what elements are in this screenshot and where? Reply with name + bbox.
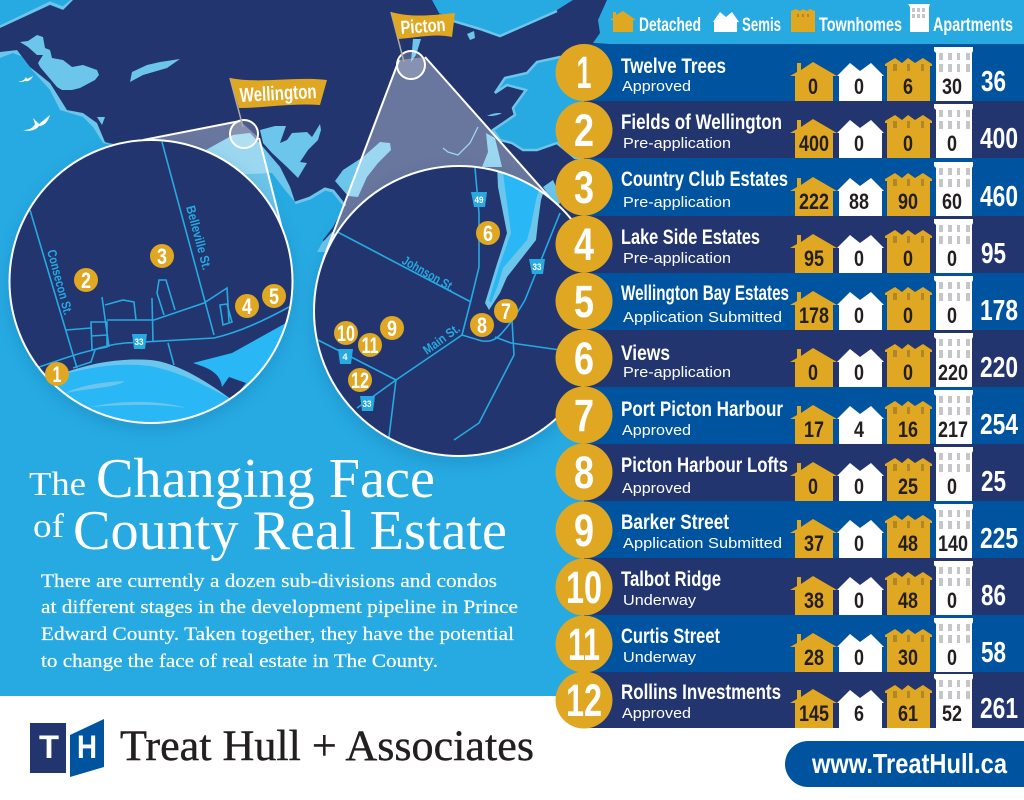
zoom cone outlines xyxy=(143,57,575,260)
legend: Townhomes xyxy=(791,9,902,36)
map markers 1 to 12: 12 xyxy=(351,368,369,393)
intro text: at different stages in the development pipeline in Prince xyxy=(41,598,518,618)
row 5: Wellington Bay Estates xyxy=(556,272,1024,330)
row 9 unit counts xyxy=(790,504,973,558)
row 4 unit counts: 95 xyxy=(804,246,824,271)
row 5 status: Application Submitted xyxy=(623,309,782,326)
road label: Consecon St.: Consecon St. xyxy=(44,248,76,316)
row 11: Curtis Street xyxy=(556,615,1024,672)
intro text: There are currently a dozen sub-divisions and condos xyxy=(41,572,497,592)
row 3 name: Country Club Estates xyxy=(621,168,788,191)
row 6 unit counts: 0 xyxy=(903,360,913,385)
row 6 name: Views xyxy=(621,342,670,365)
legend: Townhomes: Townhomes xyxy=(819,15,902,36)
row 4 unit counts xyxy=(790,219,973,273)
row 7 unit counts xyxy=(790,390,973,444)
row 10 unit counts: 38 xyxy=(804,588,824,613)
row 1: Twelve Trees xyxy=(556,44,1024,101)
map markers 1 to 12: 1 xyxy=(52,362,62,387)
row 2 badge: 2 xyxy=(574,105,594,156)
row 11 total: 58 xyxy=(981,637,1006,669)
row 4 unit counts: 0 xyxy=(947,246,957,271)
row 12 status: Approved xyxy=(622,705,691,722)
row 4 total: 95 xyxy=(981,238,1006,270)
row 3 unit counts: 222 xyxy=(799,189,829,214)
row 11 unit counts: 30 xyxy=(898,645,918,670)
row 5 badge xyxy=(556,272,612,330)
row 1 total: 36 xyxy=(981,66,1006,98)
row 9 unit counts: 37 xyxy=(804,531,824,556)
logo mark: H xyxy=(77,729,97,765)
row 5 unit counts: 178 xyxy=(799,303,829,328)
row 5 unit counts: 0 xyxy=(947,303,957,328)
row 9 badge: 9 xyxy=(574,505,594,556)
row 5 unit counts: 0 xyxy=(854,303,864,328)
map markers 1 to 12: 6 xyxy=(483,221,493,246)
row 6 unit counts: 0 xyxy=(808,360,818,385)
website pill xyxy=(785,741,1024,787)
row 2 badge xyxy=(556,102,612,158)
row 12 unit counts: 6 xyxy=(854,701,864,726)
row 7 unit counts: 17 xyxy=(804,417,824,442)
row 3 badge: 3 xyxy=(574,162,594,213)
flag: Wellington: Wellington xyxy=(239,81,317,107)
highway shield 33: 33 xyxy=(134,337,144,347)
flag: Wellington xyxy=(230,78,327,127)
row 2 unit counts: 0 xyxy=(903,131,913,156)
row 1 unit counts: 0 xyxy=(808,74,818,99)
legend: Detached xyxy=(610,11,701,36)
row 8 unit counts: 0 xyxy=(854,474,864,499)
row 6 status: Pre-application xyxy=(623,364,731,381)
row 5 name: Wellington Bay Estates xyxy=(621,282,789,305)
row 9 unit counts: 0 xyxy=(854,531,864,556)
row 5 unit counts: 0 xyxy=(903,303,913,328)
row 1 unit counts: 6 xyxy=(903,74,913,99)
row 8 badge xyxy=(556,444,612,500)
row 11 status: Underway xyxy=(623,649,697,666)
row 7 unit counts: 217 xyxy=(938,417,968,442)
row 4 unit counts: 0 xyxy=(854,246,864,271)
row 2 unit counts: 0 xyxy=(947,131,957,156)
inset map: Wellington xyxy=(10,140,295,440)
row 8 unit counts: 0 xyxy=(947,474,957,499)
row 2 status: Pre-application xyxy=(623,135,731,152)
logo mark xyxy=(30,719,104,777)
row 10 unit counts: 48 xyxy=(898,588,918,613)
row 8 status: Approved xyxy=(622,480,691,497)
row 7 name: Port Picton Harbour xyxy=(621,398,783,421)
flag: Picton xyxy=(391,12,455,62)
footer band xyxy=(0,696,1024,800)
map markers 1 to 12: 8 xyxy=(477,313,487,338)
row 9 name: Barker Street xyxy=(621,511,729,534)
title: County Real Estate xyxy=(73,500,507,562)
seagull small xyxy=(18,76,33,82)
row 4 unit counts: 0 xyxy=(903,246,913,271)
row 12: Rollins Investments xyxy=(556,672,1024,728)
intro text xyxy=(41,572,518,672)
map markers 1 to 12: 5 xyxy=(269,284,279,309)
row 3 unit counts: 88 xyxy=(849,189,869,214)
row 12 unit counts: 145 xyxy=(799,701,829,726)
row 8 name: Picton Harbour Lofts xyxy=(621,454,788,477)
row 8: Picton Harbour Lofts xyxy=(556,444,1024,501)
road label: Johnson St.: Johnson St. xyxy=(400,253,457,295)
row 4 badge: 4 xyxy=(574,219,594,270)
row 4 name: Lake Side Estates xyxy=(621,226,760,249)
row 12 unit counts xyxy=(790,674,973,728)
row 1 name: Twelve Trees xyxy=(621,55,726,78)
row 3 status: Pre-application xyxy=(623,194,731,211)
legend xyxy=(610,4,1013,36)
row 1 unit counts: 30 xyxy=(942,74,962,99)
row 10 name: Talbot Ridge xyxy=(621,568,721,591)
row 10 unit counts xyxy=(790,561,973,615)
row 9: Barker Street xyxy=(556,501,1024,558)
map markers 1 to 12 xyxy=(45,221,518,393)
road label: Belleville St.: Belleville St. xyxy=(183,204,215,272)
row 10 badge: 10 xyxy=(566,562,602,613)
legend: Semis xyxy=(713,12,781,36)
title: of xyxy=(33,508,65,545)
row 8 badge: 8 xyxy=(574,447,594,498)
locator circle: Picton xyxy=(397,51,425,79)
row 3 unit counts xyxy=(790,162,973,216)
row 6 unit counts: 0 xyxy=(854,360,864,385)
map markers 1 to 12: 2 xyxy=(81,268,91,293)
locator circle: Wellington xyxy=(230,120,258,148)
row 7 unit counts: 4 xyxy=(854,417,865,442)
Wellington inset roads xyxy=(30,142,289,368)
title: Changing Face xyxy=(96,448,435,510)
row 8 unit counts xyxy=(790,447,973,501)
intro text: to change the face of real estate in The County. xyxy=(41,652,438,672)
row 1 unit counts xyxy=(790,47,973,101)
row 11 unit counts: 28 xyxy=(804,645,824,670)
highway shield 49: 49 xyxy=(474,195,484,205)
Wellington inset water xyxy=(57,360,230,422)
row 2 unit counts: 400 xyxy=(799,131,829,156)
row 7 status: Approved xyxy=(622,422,691,439)
row 6 badge: 6 xyxy=(574,333,594,384)
row 12 unit counts: 52 xyxy=(942,701,962,726)
row 7 badge: 7 xyxy=(574,390,594,441)
row 11 name: Curtis Street xyxy=(621,625,720,648)
row 2 name: Fields of Wellington xyxy=(621,111,782,134)
row 1 badge: 1 xyxy=(576,47,592,98)
zoom cone: Picton xyxy=(323,57,575,260)
row 6 unit counts xyxy=(790,333,973,387)
highway shield 4 xyxy=(338,349,353,364)
row 10: Talbot Ridge xyxy=(556,558,1024,616)
map markers 1 to 12: 11 xyxy=(362,333,378,358)
row 10 total: 86 xyxy=(981,580,1006,612)
highway shield 33 east: 33 xyxy=(532,262,542,272)
row 11 badge: 11 xyxy=(568,619,600,670)
map markers 1 to 12: 3 xyxy=(157,244,167,269)
row 1 unit counts: 0 xyxy=(854,74,864,99)
row 2: Fields of Wellington xyxy=(556,101,1024,158)
highway shield 4: 4 xyxy=(342,352,348,362)
intro text: Edward County. Taken together, they have the potential xyxy=(41,625,514,645)
row 11 unit counts: 0 xyxy=(854,645,864,670)
row 9 unit counts: 140 xyxy=(938,531,968,556)
row 11 unit counts xyxy=(790,618,973,672)
row 12 badge: 12 xyxy=(566,675,602,726)
row 10 badge xyxy=(556,558,612,616)
Picton inset water xyxy=(485,172,543,310)
row 6 badge xyxy=(556,330,612,386)
row 10 status: Underway xyxy=(623,592,697,609)
legend: Detached: Detached xyxy=(639,15,701,36)
row 11 unit counts: 0 xyxy=(947,645,957,670)
highway shield 33 xyxy=(132,334,147,349)
row 4: Lake Side Estates xyxy=(556,216,1024,273)
map markers 1 to 12: 4 xyxy=(242,294,253,319)
row 10 unit counts: 0 xyxy=(854,588,864,613)
row 8 unit counts: 0 xyxy=(808,474,818,499)
circle shadows xyxy=(11,147,603,461)
row 4 badge xyxy=(556,216,612,272)
row 9 status: Application Submitted xyxy=(623,535,782,552)
row 11 badge xyxy=(556,616,612,672)
highway shield 33 south xyxy=(360,396,375,411)
map markers 1 to 12: 10 xyxy=(337,321,355,346)
row 10 unit counts: 0 xyxy=(947,588,957,613)
map: land and water xyxy=(0,0,610,280)
row 3 unit counts: 90 xyxy=(898,189,918,214)
row 2 unit counts xyxy=(790,104,973,158)
inset map: Picton xyxy=(314,165,604,456)
row 12 unit counts: 61 xyxy=(898,701,918,726)
row 8 total: 25 xyxy=(981,466,1006,498)
Picton inset roads xyxy=(318,168,560,440)
row 7 badge xyxy=(556,386,612,444)
row 2 unit counts: 0 xyxy=(854,131,864,156)
row 7 unit counts: 16 xyxy=(898,417,918,442)
zoom cone: Wellington xyxy=(143,121,290,260)
title: The xyxy=(29,466,86,503)
row 6: Views xyxy=(556,330,1024,387)
row 8 unit counts: 25 xyxy=(898,474,918,499)
highway shield 33 south: 33 xyxy=(362,399,372,409)
row 1 badge xyxy=(556,44,612,101)
row 12 name: Rollins Investments xyxy=(621,681,781,704)
row 6 unit counts: 220 xyxy=(938,360,968,385)
row 9 badge xyxy=(556,502,612,558)
row 4 status: Pre-application xyxy=(623,250,731,267)
legend: Apartments xyxy=(908,4,1013,36)
row 7: Port Picton Harbour xyxy=(556,386,1024,444)
row 3: Country Club Estates xyxy=(556,158,1024,216)
highway shield 49 xyxy=(471,192,487,207)
row 3 badge xyxy=(556,158,612,216)
road label: Main St.: Main St. xyxy=(420,321,463,357)
row 3 unit counts: 60 xyxy=(942,189,962,214)
row 5 badge: 5 xyxy=(574,276,594,327)
logo mark: T xyxy=(39,729,59,765)
company name: Treat Hull + Associates xyxy=(120,723,534,770)
row 5 unit counts xyxy=(790,276,973,330)
row 12 badge xyxy=(556,672,612,728)
row 9 unit counts: 48 xyxy=(898,531,918,556)
legend: Semis: Semis xyxy=(742,15,781,36)
row 1 status: Approved xyxy=(622,78,691,95)
title xyxy=(29,448,507,562)
map markers 1 to 12: 9 xyxy=(387,316,397,341)
highway shield 33 east xyxy=(529,259,545,274)
seagull large xyxy=(23,115,50,131)
map markers 1 to 12: 7 xyxy=(501,299,511,324)
flag: Picton: Picton xyxy=(400,15,446,39)
